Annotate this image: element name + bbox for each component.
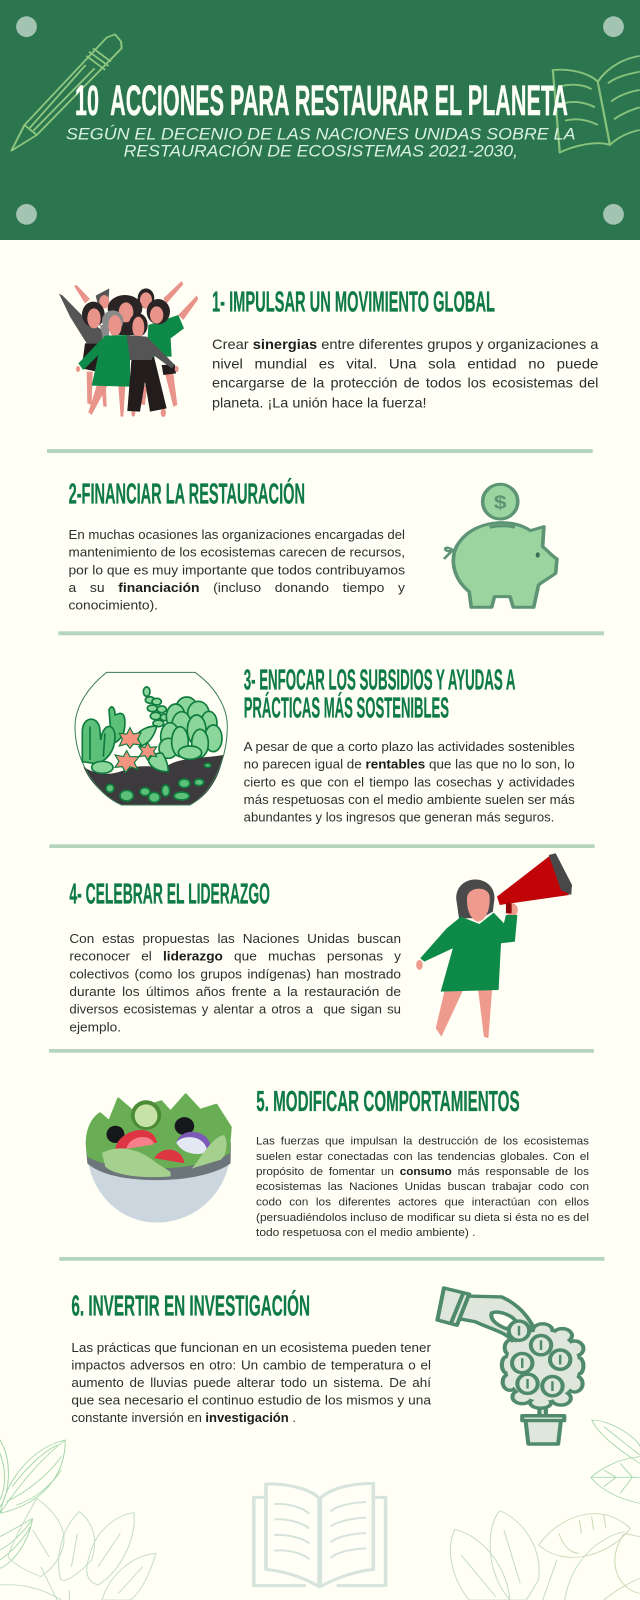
text: action 6 body (71, 1340, 432, 1425)
decorative pins (16, 16, 624, 225)
text: action 2 body: mantenimiento de los ecosistemas carecen de recursos, (68, 545, 405, 560)
illustration: salad bowl (86, 1094, 231, 1223)
panel: action 3 (75, 664, 575, 825)
text: action 4 body: durante los últimos años frente a la restauración de (69, 984, 401, 999)
text: action 5 body: ecosistemas las Naciones Unidas buscan trabajar codo con (256, 1181, 589, 1193)
text: action 5 body: (persuadiéndolos incluso de modificar su dieta si ésta no es del (256, 1212, 589, 1224)
text: action 4 body: reconocer el liderazgo que muchas personas y (69, 949, 402, 964)
text: action 3 body: no parecen igual de rentables que las que no lo son, lo (244, 757, 575, 772)
illustration: terrarium (75, 672, 227, 805)
text: action 5 body: todo respetuosa con el medio ambiente) . (256, 1227, 476, 1239)
text: action 1 body: nivel mundial es vital. Una sola entidad no puede (212, 355, 599, 371)
decoration: bottom leaves right (450, 1420, 640, 1600)
subtitle: RESTAURACIÓN DE ECOSISTEMAS 2021-2030, (124, 142, 518, 161)
decoration: bottom leaves left (0, 1440, 156, 1600)
text: action 5 body: suelen estar conectadas con las tendencias globales. Con el (256, 1151, 589, 1163)
heading 6: 6. INVERTIR EN INVESTIGACIÓN (71, 1290, 310, 1322)
icon: pencil (11, 34, 122, 151)
text: action 1 body: encargarse de la protección de todos los ecosistemas del (212, 375, 598, 391)
illustration: group of people (59, 281, 198, 417)
text: action 2 body (68, 527, 406, 613)
text: action 5 body (256, 1136, 589, 1239)
text: action 4 body (69, 931, 402, 1034)
icon: bottom open book (254, 1483, 386, 1587)
panel: action 4 (69, 853, 572, 1038)
panel: action 5 (86, 1086, 589, 1239)
icon: piggy bank (444, 484, 557, 607)
subtitle: SEGÚN EL DECENIO DE LAS NACIONES UNIDAS SOBRE LA (66, 124, 576, 143)
text: action 6 body: impactos adversos en otro: Un cambio de temperatura o el (71, 1358, 431, 1373)
text: action 6 body: constante inversión en investigación . (71, 1410, 296, 1425)
text: action 3 body (244, 739, 575, 825)
text: action 6 body: aumento de lluvias puede alterar todo un sistema. De ahí (71, 1375, 431, 1390)
text: action 2 body: conocimiento). (68, 598, 158, 613)
text: action 3 body: A pesar de que a corto plazo las actividades sostenibles (244, 739, 575, 754)
heading 2: 2-FINANCIAR LA RESTAURACIÓN (69, 478, 305, 510)
illustration: woman with megaphone (416, 853, 572, 1038)
text: action 6 body: que sea necesario el continuo estudio de los mismos y una (71, 1393, 432, 1408)
text: action 4 body: ejemplo. (69, 1019, 121, 1034)
heading 3 (244, 664, 515, 725)
text: action 2 body: por lo que es muy importante que todos contribuyamos (68, 562, 405, 577)
panel: action 2 (68, 478, 557, 613)
text: action 6 body: Las prácticas que funcionan en un ecosistema pueden tener (71, 1340, 432, 1355)
panel: action 1 (59, 281, 599, 417)
icon: piggy bank: $ (494, 492, 507, 513)
text: action 4 body: colectivos (como los grupos indígenas) han mostrado (69, 966, 401, 981)
text: action 2 body: En muchas ocasiones las organizaciones encargadas del (68, 527, 405, 542)
text: action 5 body: codo con los diferentes actores que interactúan con ellos (256, 1197, 589, 1209)
icon: open book (553, 56, 640, 153)
text: action 3 body: más respetuosas con el medio ambiente suelen ser más (244, 792, 575, 807)
text: action 1 body: planeta. ¡La unión hace la fuerza! (212, 394, 426, 410)
panel: header banner (0, 0, 640, 240)
text: action 1 body (212, 336, 599, 410)
panel: action 4: 4- CELEBRAR EL LIDERAZGO (69, 878, 270, 910)
text: action 4 body: Con estas propuestas las Naciones Unidas buscan (69, 931, 401, 946)
subtitle (66, 124, 576, 161)
text: action 5 body: propósito de fomentar un consumo más responsable de los (256, 1166, 589, 1178)
text: action 3 body: abundantes y los ingresos que generan más seguros. (244, 810, 554, 825)
text: action 1 body: Crear sinergias entre diferentes grupos y organizaciones a (212, 336, 599, 352)
text: action 5 body: Las fuerzas que impulsan la destrucción de los ecosistemas (256, 1136, 589, 1148)
text: action 3 body: cierto es que con el tiempo las cosechas y actividades (244, 774, 575, 789)
text: action 4 body: diversos ecosistemas y alentar a otros a que sigan su (69, 1002, 401, 1017)
panel: action 6 (71, 1288, 583, 1444)
illustration: hand planting coin tree (437, 1288, 583, 1444)
text: action 2 body: a su financiación (incluso donando tiempo y (68, 580, 406, 595)
